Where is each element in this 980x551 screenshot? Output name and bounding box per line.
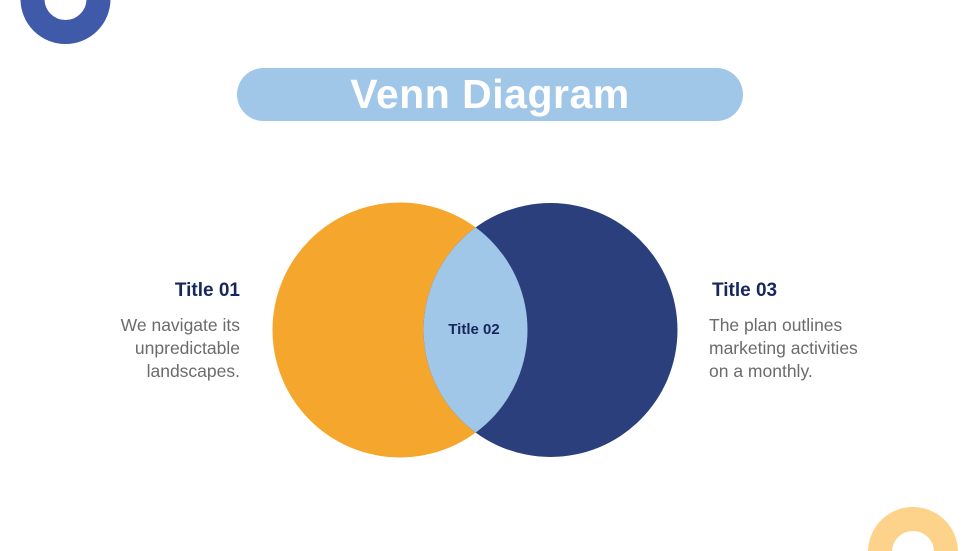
text block: Title 01: landscapes. bbox=[147, 361, 240, 381]
text block: Title 03: The plan outlines bbox=[709, 315, 842, 335]
text block: Title 01: Title 01 bbox=[175, 280, 240, 301]
text block: Title 01: We navigate its bbox=[121, 315, 240, 335]
decorative ring: bottom-right bbox=[868, 507, 958, 551]
label: Title 02: Title 02 bbox=[448, 321, 500, 338]
decorative ring: top-left bbox=[20, 0, 110, 44]
intersection bbox=[424, 228, 528, 432]
circle: left bbox=[272, 202, 528, 458]
title bbox=[237, 68, 743, 121]
venn diagram bbox=[272, 202, 678, 458]
text block: Title 03: on a monthly. bbox=[709, 361, 813, 381]
text block: Title 03: marketing activities bbox=[709, 338, 858, 358]
text block: Title 03: Title 03 bbox=[712, 280, 777, 301]
text block: Title 01 bbox=[120, 280, 240, 381]
circle: right bbox=[424, 203, 678, 457]
text block: Title 01: unpredictable bbox=[135, 338, 240, 358]
text block: Title 03 bbox=[709, 280, 858, 381]
title: Venn Diagram bbox=[350, 71, 630, 117]
